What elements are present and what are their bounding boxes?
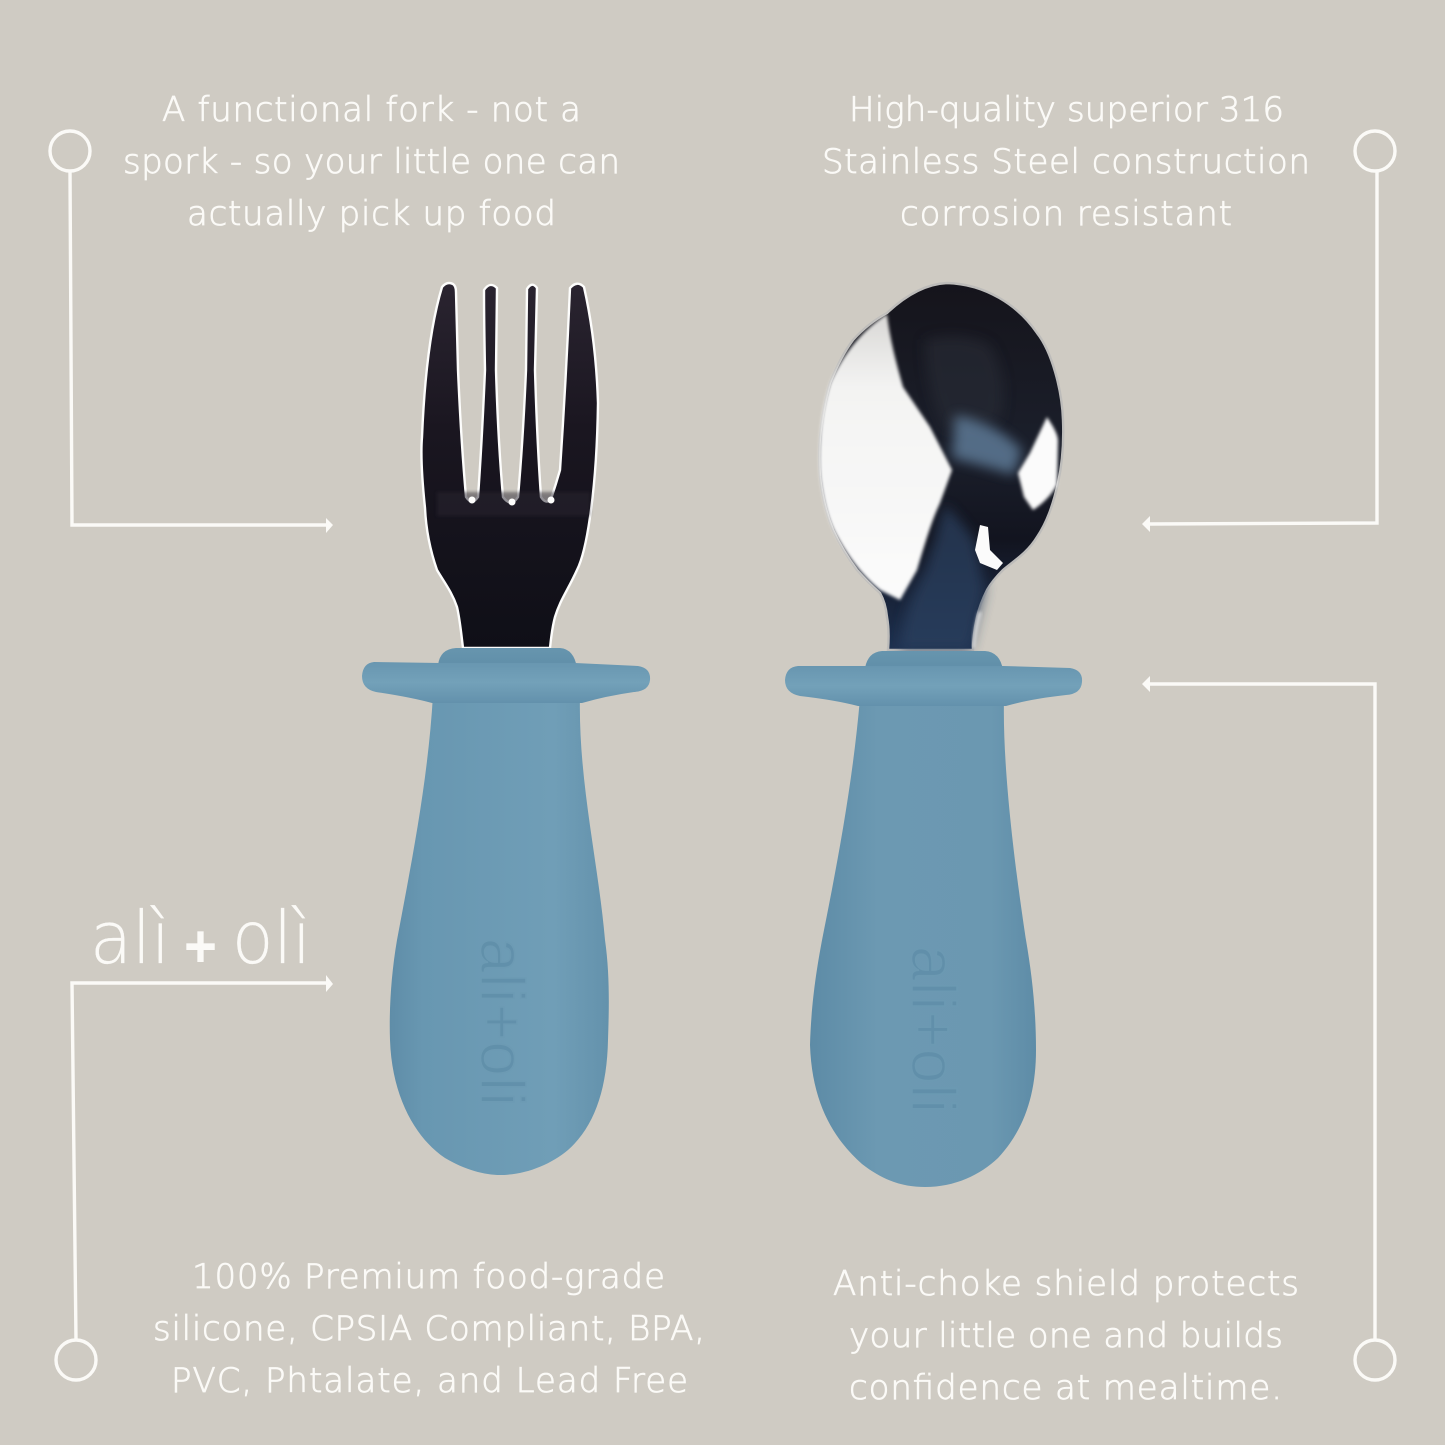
- spoon handle flange: [785, 666, 1082, 706]
- spoon stem edge glint: [972, 612, 982, 648]
- spoon white reflection: [819, 314, 952, 600]
- fork handle collar: [438, 648, 577, 680]
- fork handle body: [390, 695, 609, 1175]
- arrow: shield callout leader: [1142, 676, 1395, 1380]
- spoon handle collar: [865, 651, 1003, 682]
- arrow: silicone callout leader: [56, 975, 333, 1380]
- callout text: silicone: PVC, Phtalate, and Lead Free: [171, 1361, 688, 1401]
- spoon right highlight: [1018, 417, 1058, 510]
- brand logo: alì: [90, 896, 170, 980]
- callout text: functional fork: A functional fork - not a: [162, 90, 581, 130]
- callout text: anti-choke shield: Anti-choke shield protects: [833, 1264, 1299, 1304]
- callout text: silicone: silicone, CPSIA Compliant, BPA,: [153, 1309, 705, 1349]
- fork slot bases: [468, 496, 554, 506]
- spoon head: [819, 283, 1063, 650]
- callout text: functional fork: [123, 90, 620, 234]
- fork head: [421, 283, 598, 648]
- callout text: anti-choke shield: your little one and builds: [849, 1316, 1283, 1356]
- callout text: anti-choke shield: [833, 1264, 1299, 1408]
- spoon handle emboss: ali+oli: [898, 946, 967, 1113]
- callout text: stainless steel: [822, 90, 1310, 234]
- callout text: anti-choke shield: confidence at mealtime.: [849, 1368, 1282, 1408]
- arrow: steel callout leader: [1142, 131, 1395, 532]
- fork tine texture band: [437, 492, 590, 516]
- brand logo: +: [184, 913, 217, 980]
- spoon handle body: [810, 698, 1036, 1187]
- fork handle flange: [362, 662, 650, 703]
- callout text: silicone: [153, 1257, 705, 1401]
- brand logo: olì: [232, 896, 311, 980]
- callout text: stainless steel: corrosion resistant: [900, 194, 1232, 234]
- spoon stem reflection: [900, 505, 985, 650]
- brand logo: [90, 896, 311, 980]
- callout text: functional fork: spork - so your little one can: [123, 142, 620, 182]
- spoon small highlight: [975, 525, 1003, 570]
- callout text: stainless steel: Stainless Steel construction: [822, 142, 1310, 182]
- spoon: [785, 283, 1082, 1187]
- callout text: stainless steel: High-quality superior 316: [849, 90, 1284, 130]
- callout text: functional fork: actually pick up food: [187, 194, 556, 234]
- callout text: silicone: 100% Premium food-grade: [192, 1257, 665, 1297]
- fork handle emboss: ali+oli: [467, 938, 536, 1106]
- spoon centre grey reflection: [925, 336, 1003, 430]
- fork: [362, 283, 650, 1175]
- spoon blue reflection: [952, 415, 1022, 475]
- arrow: fork callout leader: [50, 131, 333, 533]
